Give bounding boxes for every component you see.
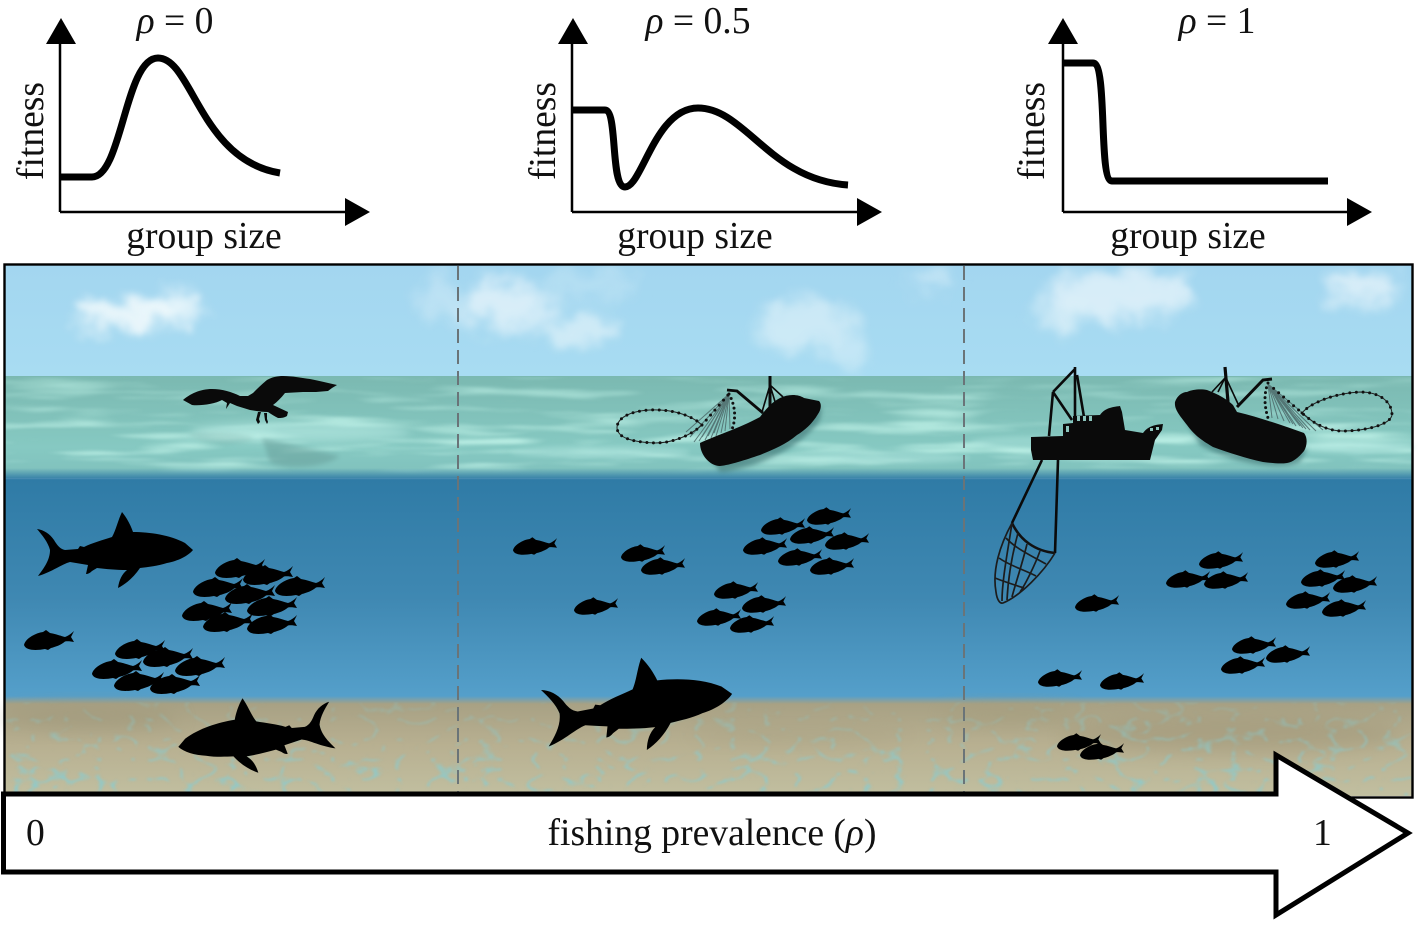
y label: fitness (523, 82, 564, 180)
net float ring (1302, 392, 1392, 431)
y label: fitness (1012, 82, 1053, 180)
fish: panel one (24, 558, 325, 694)
panel: ocean scene (0, 264, 1415, 798)
sand (5, 696, 1413, 796)
boat with purse seine net: panel two (617, 376, 822, 472)
x label: group size (617, 216, 773, 257)
net mesh (686, 394, 730, 442)
chart title: ρ = 0 (136, 1, 213, 42)
boat with purse seine net: panel three (1175, 367, 1392, 466)
net float ring (617, 410, 702, 443)
chart title: ρ = 0.5 (644, 1, 751, 42)
y label: fitness (11, 82, 52, 180)
hull shadow (1180, 412, 1308, 466)
sand patches (0, 702, 1413, 796)
chart title: ρ = 1 (1178, 1, 1255, 42)
trawl lines (1012, 460, 1058, 553)
axes (1048, 18, 1372, 226)
sharks (37, 512, 737, 784)
axes (558, 18, 882, 226)
dividers (458, 266, 964, 792)
trawler rigging (1049, 367, 1084, 436)
arrow: fishing prevalence axis (4, 755, 1408, 915)
boat hull (1175, 389, 1307, 463)
fish: panel two (513, 507, 869, 633)
fish: panel three (1038, 550, 1377, 760)
axis label: start: 0 (26, 813, 45, 854)
fitness curve (60, 58, 280, 177)
axes (46, 18, 370, 226)
icon: seabird (183, 376, 337, 424)
deep water (5, 468, 1413, 704)
axis title: fishing prevalence (ρ) (548, 813, 876, 854)
boat hull (700, 395, 821, 466)
trawler hull (1031, 406, 1163, 460)
hull shadow (704, 406, 822, 472)
cabin windows (1066, 416, 1159, 432)
chart: fitness at rho 0 (11, 1, 370, 257)
sky (5, 265, 1413, 377)
rigging (1212, 378, 1239, 406)
bird reflection (188, 432, 340, 467)
chart: fitness at rho 1 (1012, 1, 1372, 257)
fitness curve (1063, 63, 1328, 181)
x label: group size (126, 216, 282, 257)
net mesh (1268, 384, 1323, 431)
axis label: end: 1 (1313, 813, 1332, 854)
shark: upper left (37, 512, 193, 588)
trawler with net (995, 367, 1163, 603)
chart: fitness at rho 0.5 (523, 1, 882, 257)
fitness curve (572, 108, 848, 187)
rigging (762, 385, 783, 412)
trawl net (995, 523, 1055, 603)
surface wave highlights (5, 377, 1415, 475)
scene frame (4, 264, 1412, 798)
x label: group size (1110, 216, 1266, 257)
shark: lower left (172, 685, 338, 784)
shark: centre (539, 648, 737, 761)
clouds (72, 269, 1400, 371)
sea surface (5, 376, 1413, 478)
